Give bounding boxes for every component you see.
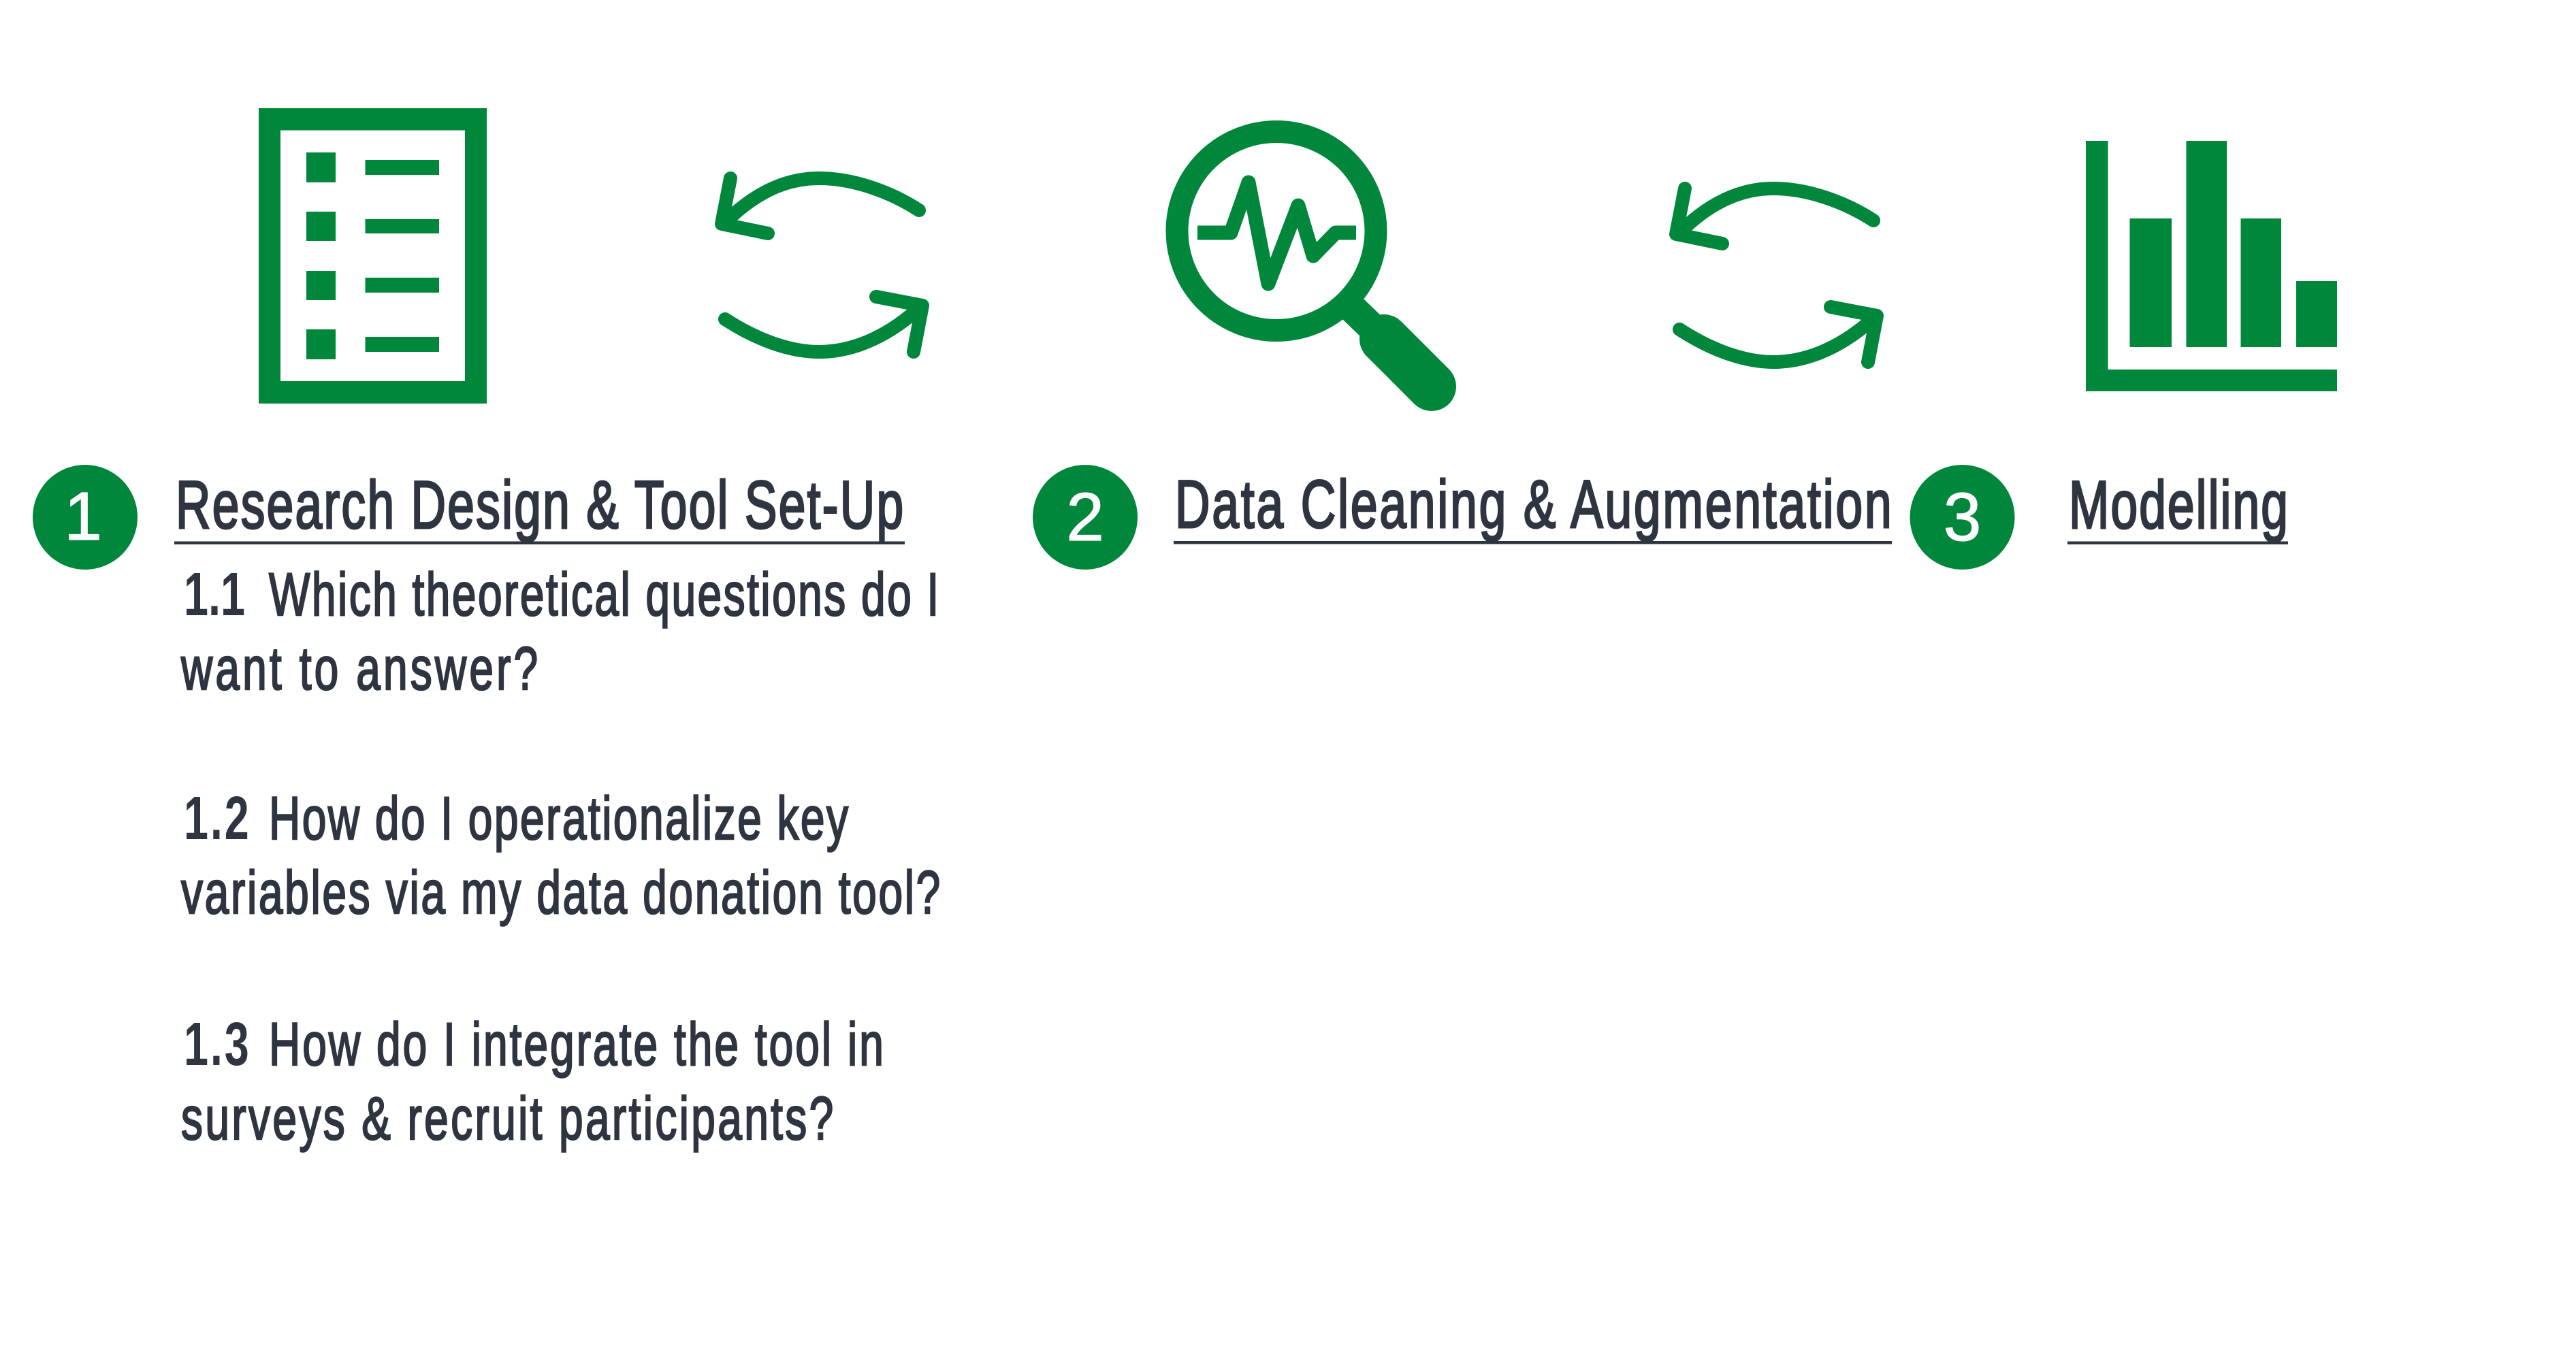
step 3 heading: Modelling (2069, 468, 2288, 543)
icon: survey document checklist (259, 108, 487, 404)
step 2 heading: Data Cleaning & Augmentation (1175, 468, 1892, 542)
question 1.2 text: How do I operationalize key (269, 785, 848, 853)
question 1.3 text: 1.3 (184, 1010, 249, 1079)
question 1.1 text (180, 560, 939, 703)
icon: magnifying glass with pulse line (1177, 132, 1432, 387)
question 1.2 text: 1.2 (184, 784, 249, 853)
question 1.3 text: surveys & recruit participants? (181, 1085, 833, 1153)
icon: cycle arrows between steps 2 and 3 (1676, 189, 1877, 362)
icon: bar chart (2086, 141, 2337, 391)
step 3 number badge (1910, 465, 2015, 570)
icon: cycle arrows between steps 1 and 2 (722, 178, 922, 352)
question 1.1 text: want to answer? (180, 636, 538, 703)
step 1 number badge (33, 465, 138, 570)
question 1.3 text: How do I integrate the tool in (269, 1011, 884, 1079)
question 1.2 text: variables via my data donation tool? (181, 859, 940, 927)
question 1.3 text (181, 1010, 884, 1153)
step 1 number badge: 1 (64, 478, 102, 555)
question 1.2 text (181, 784, 940, 927)
step 2 number badge: 2 (1066, 479, 1104, 555)
step 2 number badge (1033, 465, 1138, 570)
question 1.1 text: 1.1 (184, 560, 245, 629)
step 1 heading: Research Design & Tool Set-Up (176, 468, 903, 543)
step 3 number badge: 3 (1944, 479, 1981, 555)
question 1.1 text: Which theoretical questions do I (269, 561, 939, 629)
